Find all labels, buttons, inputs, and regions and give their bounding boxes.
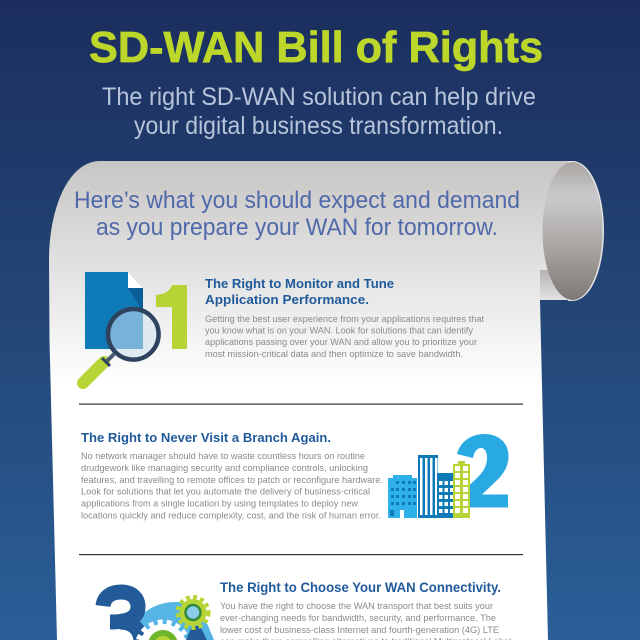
icon: dark blue building [437, 473, 454, 518]
section 2 icon: buildings and number 2 [388, 434, 508, 518]
section 3 text [220, 580, 511, 640]
section 1 text [205, 276, 484, 359]
section 1 text: Getting the best user experience from your applications requires that [205, 314, 484, 324]
icon: light blue building [388, 475, 417, 518]
number 2 [457, 434, 508, 508]
number 3 [103, 592, 141, 640]
section 1 text: most mission-critical data and then optimize to save bandwidth. [205, 349, 463, 359]
scroll paper [49, 161, 604, 640]
section 3 text: You have the right to choose the WAN transport that best suits your [220, 601, 493, 611]
section 2 text: locations quickly and reduce complexity, cost, and the risk of human error. [81, 510, 381, 520]
section 2 text: drudgework like managing security and compliance controls, unlocking [81, 463, 368, 473]
section 2 text [81, 430, 383, 520]
section 2 text: No network manager should have to waste countless hours on routine [81, 451, 365, 461]
icon: magnifier [83, 309, 159, 383]
icon: tall striped building [418, 455, 438, 518]
intro heading: Here’s what you should expect and demand [74, 187, 520, 214]
section 1 icon: document, magnifier and number 1 [83, 272, 187, 383]
icon: white gear [137, 622, 189, 640]
section 2 text: features, and travelling to remote offices to patch or reconfigure hardware. [81, 475, 383, 485]
section 3 text: ever-changing needs for bandwidth, security, and performance. The [220, 613, 496, 623]
section 1 text: applications passing over your WAN and allow you to prioritize your [205, 337, 477, 347]
intro heading [74, 187, 520, 241]
title: SD-WAN Bill of Rights [89, 23, 543, 72]
scroll curl [540, 161, 604, 301]
section 1 text: you know what is on your WAN. Look for solutions that can identify [205, 326, 473, 336]
section 2 text: The Right to Never Visit a Branch Again. [81, 430, 331, 445]
number 1 [156, 285, 187, 349]
subtitle: The right SD-WAN solution can help drive [102, 83, 536, 111]
icon: green gear [178, 597, 208, 628]
section 3 text: lower cost of business-class Internet and fourth-generation (4G) LTE [220, 625, 499, 635]
section 2 text: applications from a single location by using templates to deploy new [81, 498, 358, 508]
intro heading: as you prepare your WAN for tomorrow. [96, 214, 498, 241]
icon: dark gear [186, 626, 207, 640]
subtitle [102, 83, 536, 140]
subtitle: your digital business transformation. [134, 112, 503, 140]
section 3 text: The Right to Choose Your WAN Connectivity. [220, 580, 501, 595]
icon: document [85, 272, 143, 349]
section 1 text: Application Performance. [205, 292, 369, 307]
section 3 icon: number 3 and gears [103, 592, 214, 640]
section 1 text: The Right to Monitor and Tune [205, 276, 394, 291]
icon: light blue gear ring [136, 602, 214, 640]
icon: green building [453, 461, 470, 518]
section 2 text: Look for solutions that let you automate the delivery of business-critical [81, 486, 370, 496]
